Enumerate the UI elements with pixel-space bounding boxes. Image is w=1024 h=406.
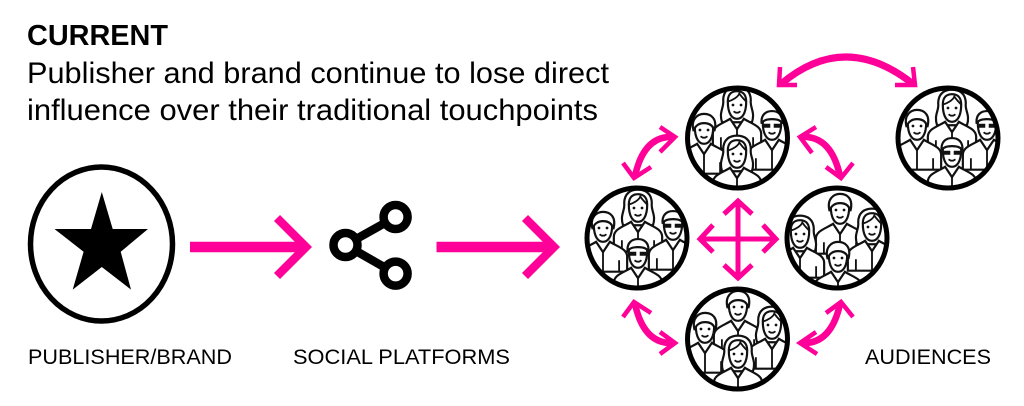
audience circle: top [685,86,790,190]
arrow: central four-way cross [700,201,776,278]
subtitle text block [27,57,609,127]
subtitle text block: influence over their traditional touchpoints [27,94,598,127]
label: social platforms: SOCIAL PLATFORMS [293,345,510,369]
arrow: curved bottom-left [623,302,675,354]
arrow: social platforms to audiences [436,218,554,276]
icon: publisher/brand star in circle [30,167,172,321]
arrow: curved top between audiences [779,57,915,85]
arrow: publisher to social platforms [190,218,306,276]
audience circle: right [784,186,890,290]
arrow: curved top-left [623,127,675,178]
arrow: curved bottom-right [800,302,853,354]
arrow: curved top-right [800,127,853,178]
icon: social share [334,205,408,286]
audience circle: bottom [685,286,790,392]
label: publisher/brand: PUBLISHER/BRAND [28,345,232,369]
subtitle text block: Publisher and brand continue to lose direct [27,57,609,90]
audience circle: left [584,186,690,290]
label: audiences: AUDIENCES [865,345,991,369]
audience circle: far right [896,86,1000,190]
title: CURRENT: CURRENT [27,20,168,52]
